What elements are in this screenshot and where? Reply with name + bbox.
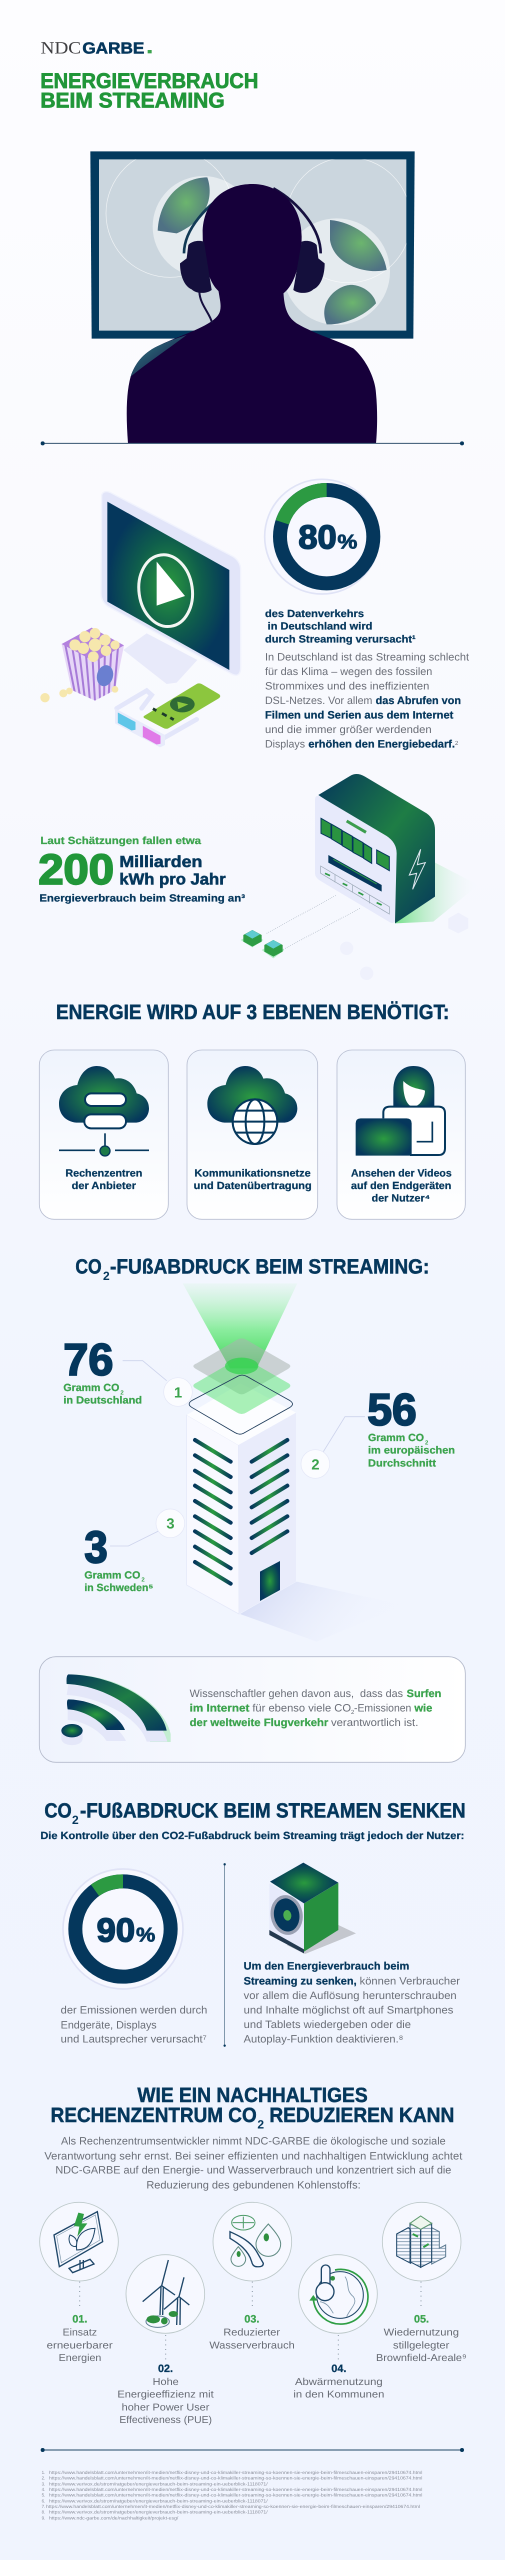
section: sustainable data centre: [40, 2084, 467, 2520]
stat: 200 billion kWh: 200: [38, 846, 114, 893]
body text: und Inhalte möglichst oft auf Smartphones: [244, 2004, 453, 2016]
label: 04.: [331, 2362, 346, 2374]
callout text: im Internet: [190, 1702, 249, 1714]
heading: 2: [72, 1813, 79, 1827]
callout text: für ebenso viele CO: [252, 1702, 351, 1714]
label: in den Kommunen: [293, 2389, 384, 2400]
stat: 76: 76: [63, 1334, 113, 1385]
label: 02.: [158, 2362, 173, 2374]
body text: Strommixes und des ineffizienten: [265, 680, 429, 692]
screen content with leaves: [97, 149, 411, 333]
icon: wind turbines: [126, 2255, 205, 2333]
footnotes: 5.: [42, 2493, 45, 2498]
footnotes: [42, 2470, 422, 2520]
callout text: Wissenschaftler gehen davon aus, dass das: [190, 1687, 403, 1699]
icon: monitor with leaf and bolt: [40, 2202, 118, 2281]
intro paragraph: Verantwortung sehr ernst. Bei seiner effizienten und nachhaltigen Entwicklung achtet: [44, 2150, 462, 2162]
body text: 2: [455, 740, 458, 746]
heading: 2: [103, 1269, 110, 1283]
divider: [223, 1863, 226, 2047]
title: BEIM STREAMING: [40, 88, 225, 112]
item 03: reduced water use: [209, 2202, 295, 2351]
label: stillgelegter: [393, 2340, 449, 2351]
section: streaming share: [38, 479, 478, 980]
marker 3: 3: [166, 1516, 174, 1532]
footnotes: 4.: [42, 2487, 45, 2492]
panel: flight comparison: [39, 1657, 465, 1762]
body text: können Verbraucher: [360, 1975, 460, 1987]
marker 2: 2: [311, 1456, 319, 1473]
label: 05.: [414, 2313, 429, 2325]
footnotes: https://www.handelsblatt.com/unternehmen/it-medien/netflix-disney-und-co-klimakiller-streaming-so-koennen-sie-energie-beim-filmeschauen-einsparen/29410674.html: [49, 2476, 422, 2481]
section: CO2 footprint: [63, 1255, 455, 1642]
label: [65, 1167, 142, 1191]
label: [351, 1167, 452, 1204]
illustration: viewer watching screen: [90, 149, 415, 443]
connectors: [110, 1361, 365, 1546]
stat: 3: in Schweden⁵: [84, 1582, 153, 1593]
label: [293, 2362, 384, 2400]
icon: cloud server: [59, 1066, 149, 1156]
intro paragraph: NDC-GARBE auf den Energie- und Wasserverbrauch und konzentriert sich auf die: [55, 2164, 451, 2176]
label: Wiedernutzung: [384, 2327, 459, 2338]
illustration: server box: [241, 774, 478, 980]
title: ENERGIEVERBRAUCH: [40, 69, 258, 93]
intro paragraph: Als Rechenzentrumsentwickler nimmt NDC-GARBE die ökologische und soziale: [61, 2135, 446, 2147]
icon: thermometer and globe: [299, 2255, 377, 2333]
marker 1: [164, 1378, 192, 1406]
logo: GARBE: [82, 39, 144, 57]
stat: 56: 2: [425, 1439, 428, 1446]
donut chart: 90%: %: [136, 1924, 155, 1946]
item 02: energy efficiency: [117, 2255, 214, 2425]
stat: 3: Gramm CO: [84, 1569, 140, 1581]
stat: 3: [84, 1522, 153, 1593]
stat caption: [61, 2004, 207, 2045]
intro paragraph: Reduzierung des gebundenen Kohlenstoffs:: [146, 2179, 361, 2191]
label: hoher Power User: [122, 2402, 209, 2413]
stat: 3: 3: [84, 1522, 108, 1572]
footnotes: 8.: [42, 2510, 45, 2515]
heading: CO: [44, 1799, 72, 1822]
body text: und die immer größer werdenden: [265, 723, 432, 735]
icon: tap and drops: [213, 2202, 292, 2281]
stat caption: in Deutschland wird: [268, 620, 372, 632]
label: Effectiveness (PUE): [119, 2414, 212, 2425]
panel: networks: [187, 1050, 318, 1219]
stat: 200 billion kWh: Milliarden: [119, 853, 202, 871]
label: Rechenzentren: [65, 1167, 142, 1179]
callout text: Surfen: [407, 1687, 441, 1699]
footnotes: 9.: [42, 2515, 45, 2520]
footnotes: https://www.ndc-garbe.com/de/nachhaltigkeit/projekt-esg/: [49, 2515, 178, 2520]
stat caption: der Emissionen werden durch: [61, 2004, 207, 2016]
silhouette with headphones: [127, 184, 377, 443]
screen frame: [90, 151, 415, 339]
item 01: renewable energy: [40, 2202, 118, 2363]
body text: und Tablets wiedergeben oder die: [244, 2018, 411, 2030]
icon: speaker cube: [267, 1863, 356, 1954]
label: Einsatz: [63, 2327, 97, 2338]
label: Kommunikationsnetze: [194, 1167, 311, 1179]
footnotes: https://www.handelsblatt.com/unternehmen/it-medien/netflix-disney-und-co-klimakiller-streaming-so-koennen-sie-energie-beim-filmeschauen-einsparen/29410674.html: [49, 2470, 422, 2475]
label: [117, 2362, 214, 2425]
body text: erhöhen den Energiebedarf.: [308, 738, 455, 750]
body text: [265, 651, 469, 750]
heading: WIE EIN NACHHALTIGES: [137, 2084, 368, 2107]
stat: 76: 2: [120, 1389, 124, 1396]
callout text: wie: [414, 1702, 432, 1714]
illustration: popcorn box: [40, 628, 124, 702]
header section: [40, 38, 464, 445]
icon: user with laptop: [356, 1066, 445, 1156]
footnotes: https://www.handelsblatt.com/unternehmen/it-medien/netflix-disney-und-co-klimakiller-streaming-so-koennen-sie-energie-beim-filmeschauen-einsparen/29410674.html: [49, 2493, 422, 2498]
stat: 3: 2: [141, 1576, 145, 1583]
illustration: monitor: [101, 492, 241, 684]
label: Energieeffizienz mit: [117, 2389, 214, 2400]
body text: [244, 1960, 460, 2045]
body text: Streaming zu senken,: [244, 1975, 357, 1987]
label: erneuerbarer: [47, 2340, 113, 2351]
panel: data centres: [39, 1050, 168, 1219]
heading: 2: [257, 2118, 264, 2131]
label: der Anbieter: [72, 1180, 136, 1191]
label: [194, 1167, 312, 1191]
stat: 200 billion kWh: Energieverbrauch beim Streaming an³: [39, 892, 245, 904]
heading: -FUßABDRUCK BEIM STREAMEN SENKEN: [80, 1799, 466, 1822]
heading: ENERGIE WIRD AUF 3 EBENEN BENÖTIGT:: [56, 1001, 449, 1024]
donut chart: 90%: [63, 1869, 183, 1989]
label: [209, 2313, 295, 2351]
footnotes: https://www.handelsblatt.com/unternehmen/it-medien/netflix-disney-und-co-klimakiller-streaming-so-koennen-sie-energie-beim-filmeschauen-einsparen/29410674.html: [49, 2487, 422, 2492]
label: Brownfield-Areale⁹: [376, 2352, 467, 2363]
divider line: [41, 441, 464, 445]
body text: Filmen und Serien aus dem Internet: [265, 709, 453, 721]
body text: das Abrufen von: [376, 694, 461, 706]
label: Energien: [59, 2352, 101, 2363]
heading: REDUZIEREN KANN: [269, 2104, 454, 2127]
marker 2: [301, 1450, 330, 1478]
windows: [195, 1440, 287, 1584]
illustration: building with beam: [183, 1283, 403, 1642]
subheading: Die Kontrolle über den CO2-Fußabdruck beim Streaming trägt jedoch der Nutzer:: [40, 1830, 464, 1841]
stat: 76: [63, 1334, 142, 1406]
section: comparison and reduction: [39, 1657, 466, 2047]
body text: Displays: [265, 738, 305, 750]
label: und Datenübertragung: [194, 1180, 312, 1191]
stat: 76: in Deutschland: [63, 1394, 142, 1406]
label: Hohe: [153, 2376, 179, 2387]
callout text: [190, 1687, 441, 1728]
illustration: 3D glasses and phone: [115, 683, 220, 747]
item 04: waste heat: [293, 2255, 384, 2400]
footnotes: 2.: [42, 2476, 45, 2481]
heading: [51, 2084, 454, 2131]
footnotes: 3.: [42, 2481, 45, 2486]
icon: cloud globe: [207, 1066, 297, 1144]
body text: Um den Energieverbrauch beim: [244, 1960, 409, 1972]
heading: RECHENZENTRUM CO: [51, 2104, 257, 2127]
logo: [41, 38, 152, 57]
label: 03.: [244, 2313, 259, 2325]
heading: CO: [75, 1255, 102, 1278]
stat: 76: Gramm CO: [63, 1382, 119, 1393]
donut chart: 90%: 90: [97, 1912, 135, 1949]
footnotes: 7.: [42, 2504, 45, 2509]
logo: NDC: [41, 38, 81, 57]
body text: für das Klima – wegen des fossilen: [265, 665, 432, 677]
stat caption: und Lautsprecher verursacht⁷: [61, 2033, 207, 2045]
stat: 56: [367, 1384, 455, 1469]
icon: wifi: [61, 1674, 171, 1745]
stat: 200 billion kWh: [38, 835, 245, 904]
callout text: der weltweite Flugverkehr: [190, 1716, 328, 1728]
label: [376, 2313, 467, 2363]
callout text: verantwortlich ist.: [331, 1716, 418, 1728]
panel: end devices: [337, 1050, 465, 1219]
label: Wasserverbrauch: [209, 2340, 295, 2351]
label: Ansehen der Videos: [351, 1167, 452, 1179]
footnotes: https://www.verivox.de/strom/ratgeber/energieverbrauch-beim-streaming-ein-ueberblick-1118071/: [49, 2498, 268, 2503]
item 05: brownfield reuse: [376, 2202, 467, 2363]
footnotes: https://www.verivox.de/strom/ratgeber/energieverbrauch-beim-streaming-ein-ueberblick-1118071/: [49, 2510, 268, 2515]
stat caption: Endgeräte, Displays: [61, 2019, 157, 2031]
marker 3: [156, 1509, 185, 1538]
label: der Nutzer⁴: [372, 1192, 430, 1204]
label: 01.: [72, 2313, 87, 2325]
stat caption: des Datenverkehrs: [265, 608, 364, 619]
title: [40, 69, 258, 112]
label: [47, 2313, 113, 2363]
beam of light: [183, 1283, 297, 1368]
callout text: 2: [351, 1709, 354, 1715]
footnotes: https://www.handelsblatt.com/unternehmen/it-medien/netflix-disney-und-co-klimakiller-streaming-so-koennen-sie-energie-beim-filmeschauen-einsparen/29410674.html: [46, 2504, 420, 2509]
marker 1: 1: [174, 1384, 182, 1401]
footnotes: 1.: [42, 2470, 45, 2475]
body text: vor allem die Auflösung herunterschrauben: [244, 1989, 457, 2001]
stat: 56: im europäischen: [368, 1444, 455, 1456]
callout text: -Emissionen: [354, 1702, 411, 1714]
donut chart: 80%: [265, 479, 379, 594]
footnotes: 6.: [42, 2498, 45, 2503]
label: Reduzierter: [223, 2327, 280, 2338]
divider line: [41, 2448, 464, 2452]
stat: 56: 56: [367, 1384, 417, 1435]
label: auf den Endgeräten: [351, 1180, 451, 1191]
stat caption: durch Streaming verursacht¹: [265, 633, 416, 645]
footnotes: https://www.verivox.de/strom/ratgeber/energieverbrauch-beim-streaming-ein-ueberblick-1118071/: [49, 2481, 268, 2486]
stat caption: [265, 608, 416, 645]
body text: Autoplay-Funktion deaktivieren.⁸: [244, 2033, 403, 2045]
donut chart: 80%: %: [337, 530, 357, 553]
label: Abwärmenutzung: [295, 2376, 383, 2387]
section: three levels: [39, 1001, 465, 1219]
intro paragraph: [44, 2135, 462, 2191]
door: [260, 1561, 280, 1601]
stat: 56: Gramm CO: [368, 1432, 424, 1443]
body text: In Deutschland ist das Streaming schlecht: [265, 651, 469, 663]
stat: 200 billion kWh: Laut Schätzungen fallen etwa: [40, 835, 201, 846]
stat: 56: Durchschnitt: [368, 1457, 436, 1469]
stat: 200 billion kWh: kWh pro Jahr: [119, 870, 226, 888]
body text: DSL-Netzes. Vor allem: [265, 694, 372, 706]
heading: -FUßABDRUCK BEIM STREAMING:: [110, 1255, 429, 1278]
donut chart: 80%: 80: [298, 518, 337, 556]
icon: city buildings: [382, 2202, 461, 2281]
